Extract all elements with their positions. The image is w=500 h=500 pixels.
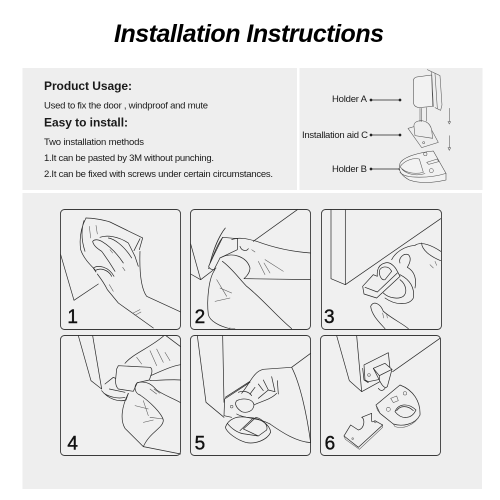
step 5 panel (190, 336, 311, 456)
step number 1: 1 (67, 307, 78, 328)
text: method 2: 2.It can be fixed with screws under certain circumstances. (44, 169, 273, 180)
step 1 panel (60, 210, 181, 330)
panel: parts diagram (300, 68, 482, 190)
label: installation aid C: Installation aid C (302, 130, 368, 141)
label: holder B: Holder B (332, 164, 367, 175)
text: methods intro: Two installation methods (44, 137, 144, 148)
label: holder A: Holder A (332, 94, 368, 105)
panel: steps background (22, 193, 482, 489)
heading: product usage: Product Usage: (44, 79, 132, 93)
step number 2: 2 (195, 307, 205, 328)
text: method 1: 1.It can be pasted by 3M without punching. (44, 153, 214, 164)
step number 5: 5 (195, 433, 205, 454)
diagram: holder parts (399, 70, 451, 182)
step number 3: 3 (324, 307, 335, 328)
text: usage description: Used to fix the door , windproof and mute (44, 100, 208, 112)
step 4 panel (60, 336, 181, 456)
title: Installation Instructions (114, 20, 384, 48)
step 6 panel (320, 336, 440, 456)
leader lines (370, 99, 401, 170)
heading: easy to install: Easy to install: (44, 116, 128, 130)
step number 4: 4 (67, 433, 78, 454)
step number 6: 6 (325, 433, 335, 454)
panel: product usage (22, 68, 297, 190)
step 2 panel (190, 210, 311, 330)
step 3 panel (322, 210, 442, 330)
